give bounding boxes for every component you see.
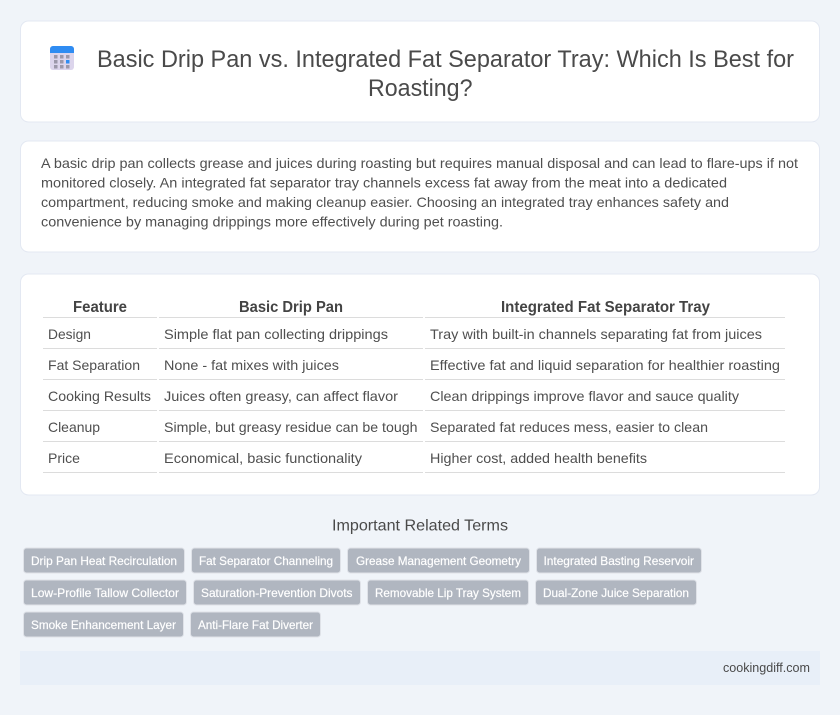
table header: Feature — [73, 299, 127, 316]
row: design: Tray with built-in channels separating fat from juices — [430, 326, 762, 342]
summary paragraph: monitored closely. An integrated fat separator tray channels excess fat away from the meat into a dedicated — [41, 174, 727, 190]
row: fat separation: Effective fat and liquid separation for healthier roasting — [430, 357, 780, 373]
row: design: Design — [48, 326, 91, 342]
summary paragraph: compartment, reducing smoke and making cleanup easier. Choosing an integrated tray enhances safety and — [41, 194, 729, 210]
tag group: related terms — [24, 548, 702, 637]
tag: Drip Pan Heat Recirculation — [31, 554, 177, 568]
panel: summary — [20, 141, 820, 252]
summary paragraph: convenience by managing drippings more effectively during pet roasting. — [41, 214, 503, 230]
row: cooking results: Juices often greasy, can affect flavor — [164, 388, 398, 404]
table header: Basic Drip Pan — [239, 299, 343, 316]
tag — [24, 580, 186, 605]
row: fat separation — [43, 357, 785, 380]
tag — [536, 580, 696, 605]
summary paragraph — [41, 155, 798, 230]
tag — [536, 548, 702, 573]
row: cooking results: Clean drippings improve flavor and sauce quality — [430, 388, 739, 404]
tag — [192, 548, 340, 573]
tag — [190, 612, 320, 637]
tag: Dual-Zone Juice Separation — [543, 586, 689, 600]
icon: calendar — [50, 46, 74, 70]
row: price: Price — [48, 450, 80, 466]
tag: Smoke Enhancement Layer — [31, 618, 176, 632]
panel: comparison table — [20, 274, 820, 495]
row: design: Simple flat pan collecting drippings — [164, 326, 388, 342]
tag — [194, 580, 360, 605]
title: Basic Drip Pan vs. Integrated Fat Separator Tray: Which Is Best for — [97, 46, 794, 73]
row: fat separation: None - fat mixes with juices — [164, 357, 339, 373]
title: Roasting? — [368, 75, 472, 102]
row: cleanup: Simple, but greasy residue can be tough — [164, 419, 418, 435]
panel: header — [20, 21, 820, 122]
row: cooking results — [43, 388, 785, 411]
tag — [24, 548, 184, 573]
row: price: Higher cost, added health benefits — [430, 450, 647, 466]
summary paragraph: A basic drip pan collects grease and juices during roasting but requires manual disposal and can lead to flare-ups if not — [41, 155, 798, 171]
row: cleanup: Cleanup — [48, 419, 100, 435]
row: cleanup: Separated fat reduces mess, easier to clean — [430, 419, 708, 435]
row: price: Economical, basic functionality — [164, 450, 362, 466]
tag — [24, 612, 184, 637]
tag: Removable Lip Tray System — [375, 586, 521, 600]
table header — [43, 299, 785, 318]
tag: Integrated Basting Reservoir — [544, 554, 694, 568]
footer: cookingdiff.com — [723, 660, 810, 675]
tag: Anti-Flare Fat Diverter — [198, 618, 313, 632]
tag — [348, 548, 530, 573]
row: cleanup — [43, 419, 785, 442]
row: cooking results: Cooking Results — [48, 388, 151, 404]
table header: Integrated Fat Separator Tray — [501, 299, 710, 316]
row: price — [43, 450, 785, 473]
title — [97, 46, 794, 102]
footer — [20, 651, 820, 685]
row: fat separation: Fat Separation — [48, 357, 140, 373]
tag — [368, 580, 528, 605]
tag: Saturation-Prevention Divots — [201, 586, 352, 600]
tag: Grease Management Geometry — [356, 554, 521, 568]
tag: Fat Separator Channeling — [199, 554, 333, 568]
tag: Low-Profile Tallow Collector — [31, 586, 179, 600]
row: design — [43, 326, 785, 349]
heading: related terms: Important Related Terms — [332, 518, 508, 534]
